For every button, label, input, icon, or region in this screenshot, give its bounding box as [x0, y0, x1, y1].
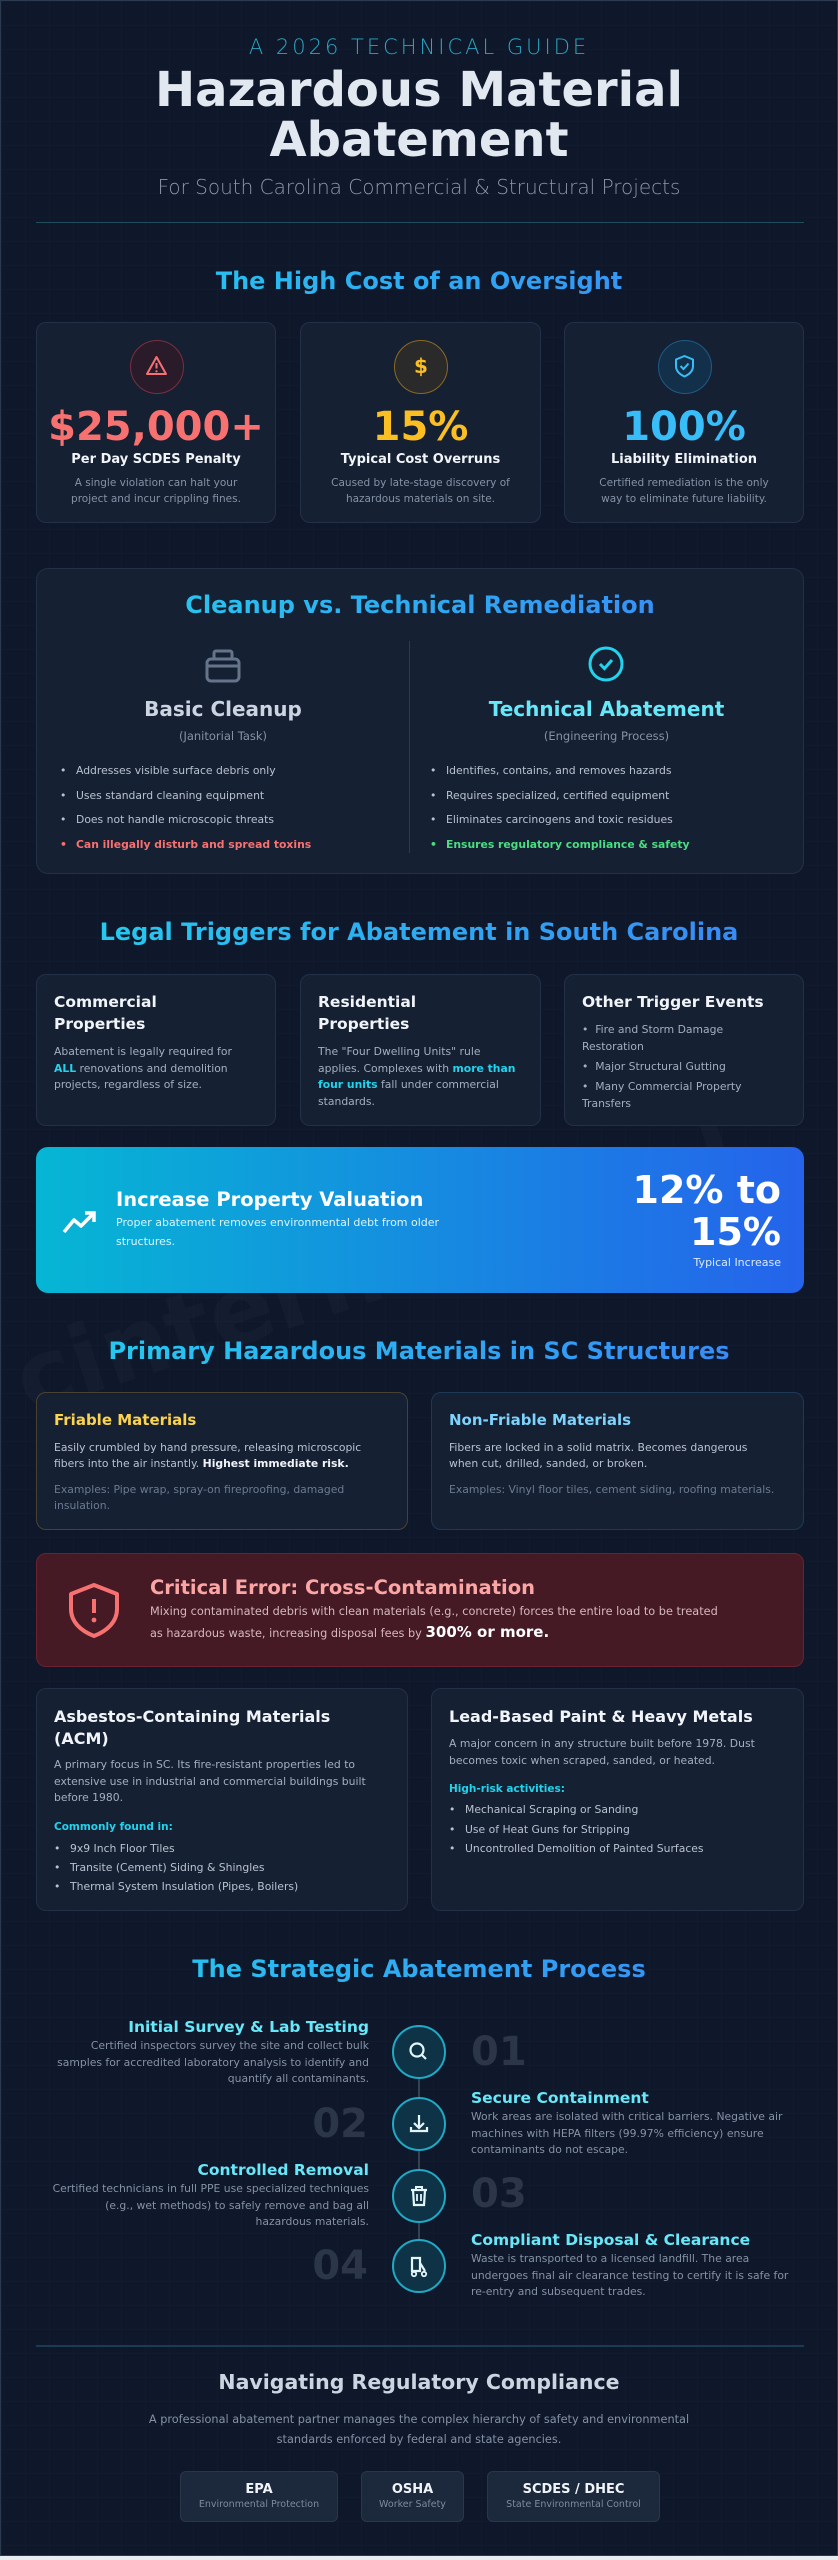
- card: other triggers: Other Trigger Events: [582, 993, 764, 1011]
- step 2: 02: [312, 2101, 368, 2147]
- timeline: [53, 2018, 788, 2298]
- icon: bucket: [206, 650, 240, 682]
- stat: 15%: [373, 404, 468, 450]
- card: overruns: Typical Cost Overruns: [341, 452, 500, 467]
- card: asbestos: before 1980.: [54, 1791, 123, 1804]
- banner text: structures.: [116, 1235, 175, 1248]
- heading: legal triggers: Legal Triggers for Abatement in South Carolina: [100, 918, 738, 946]
- column: technical abatement: Eliminates carcinogens and toxic residues: [446, 813, 673, 826]
- banner stat: [633, 1168, 781, 1269]
- column: basic cleanup: Basic Cleanup: [144, 697, 302, 721]
- step 1: Initial Survey & Lab Testing: [128, 2018, 369, 2036]
- step 4: re-entry and subsequent trades.: [471, 2285, 646, 2298]
- card: residential: Residential: [318, 993, 416, 1011]
- step 1: samples for accredited laboratory analysis to identify and: [57, 2056, 369, 2068]
- badge: EPA: [180, 2471, 338, 2522]
- step 4: 04: [312, 2243, 368, 2289]
- card: lead: Use of Heat Guns for Stripping: [465, 1822, 630, 1836]
- column: technical abatement: Ensures regulatory compliance & safety: [446, 838, 690, 851]
- step 1: [57, 2018, 527, 2085]
- icon: shield: [658, 340, 712, 394]
- icon: search: [392, 2025, 446, 2079]
- column: technical abatement: Requires specialized, certified equipment: [446, 789, 669, 802]
- card: asbestos: [36, 1688, 408, 1911]
- icon: warning: [130, 340, 184, 394]
- card: commercial: Properties: [54, 1015, 145, 1033]
- column: technical abatement: [432, 697, 724, 851]
- card: lead: Uncontrolled Demolition of Painted Surfaces: [465, 1842, 704, 1855]
- card: penalty: A single violation can halt your: [75, 477, 237, 489]
- paragraph: compliance: [149, 2413, 689, 2446]
- card: overruns: Caused by late-stage discovery of: [331, 477, 510, 489]
- card: liability: Liability Elimination: [611, 452, 757, 467]
- banner text: Increase Property Valuation: [116, 1188, 423, 1211]
- card: asbestos: A primary focus in SC. Its fire-resistant properties led to: [54, 1758, 355, 1771]
- icon: check circle: [588, 646, 624, 682]
- banner: property valuation: [36, 1147, 804, 1293]
- banner text: [116, 1188, 440, 1248]
- icon: shield alert: [69, 1583, 119, 1638]
- card: asbestos: Transite (Cement) Siding & Shingles: [70, 1861, 264, 1874]
- column: basic cleanup: Does not handle microscopic threats: [76, 813, 274, 826]
- column: basic cleanup: Addresses visible surface debris only: [76, 764, 276, 777]
- main title: [155, 62, 683, 168]
- card: commercial: Abatement is legally required for: [54, 1045, 232, 1058]
- callout text: [150, 1576, 718, 1641]
- heading: primary materials: Primary Hazardous Materials in SC Structures: [108, 1337, 730, 1365]
- callout text: as hazardous waste, increasing disposal fees by 300% or more.: [150, 1623, 549, 1641]
- card: overruns: [300, 322, 541, 523]
- icon: trend up: [62, 1211, 96, 1234]
- badge: SCDES: SCDES / DHEC: [523, 2482, 624, 2497]
- column: basic cleanup: Uses standard cleaning equipment: [76, 789, 264, 802]
- icon: truck: [392, 2239, 446, 2293]
- card: residential: Properties: [318, 1015, 409, 1033]
- card: lead: High-risk activities:: [449, 1783, 565, 1795]
- badge: SCDES: [487, 2471, 660, 2522]
- heading: process: The Strategic Abatement Process: [192, 1955, 646, 1983]
- step 2: Secure Containment: [471, 2089, 649, 2107]
- badge: OSHA: OSHA: [392, 2482, 433, 2497]
- badge: EPA: Environmental Protection: [199, 2499, 319, 2510]
- callout text: Mixing contaminated debris with clean materials (e.g., concrete) forces the entire load to be treated: [150, 1605, 718, 1618]
- banner text: Proper abatement removes environmental debt from older: [116, 1216, 439, 1229]
- subtitle: For South Carolina Commercial & Structural Projects: [158, 175, 680, 199]
- heading: regulatory compliance: Navigating Regulatory Compliance: [218, 2370, 620, 2394]
- step 4: Compliant Disposal & Clearance: [471, 2231, 750, 2249]
- icon: money: [394, 340, 448, 394]
- banner stat: 15%: [690, 1210, 781, 1254]
- card: friable: fibers into the air instantly. Highest immediate risk.: [54, 1457, 349, 1470]
- column: technical abatement: Identifies, contains, and removes hazards: [446, 764, 672, 777]
- badge: OSHA: Worker Safety: [379, 2499, 446, 2510]
- card: other triggers: • Fire and Storm Damage: [582, 1023, 723, 1036]
- card: asbestos: Commonly found in:: [54, 1821, 173, 1833]
- heading: process: [1, 1953, 837, 1985]
- step 1: Certified inspectors survey the site and collect bulk: [91, 2039, 369, 2052]
- column: basic cleanup: [62, 697, 311, 851]
- tagline: A 2026 TECHNICAL GUIDE: [249, 35, 589, 59]
- heading: high cost: The High Cost of an Oversight: [216, 267, 622, 295]
- column: basic cleanup: Can illegally disturb and spread toxins: [76, 838, 311, 851]
- card: commercial: ALL renovations and demolition: [54, 1062, 228, 1074]
- callout text: Critical Error: Cross-Contamination: [150, 1576, 535, 1599]
- paragraph: compliance: standards enforced by federal and state agencies.: [277, 2432, 561, 2446]
- card: residential: The "Four Dwelling Units" rule: [318, 1045, 480, 1058]
- card: residential: applies. Complexes with more than: [318, 1062, 515, 1074]
- card: asbestos: 9x9 Inch Floor Tiles: [70, 1842, 175, 1855]
- card: lead: A major concern in any structure built before 1978. Dust: [449, 1737, 755, 1750]
- heading: primary materials: [1, 1335, 837, 1367]
- step 3: 03: [471, 2171, 527, 2217]
- badge: EPA: EPA: [245, 2482, 273, 2497]
- card: asbestos: Asbestos-Containing Materials: [54, 1707, 330, 1726]
- card: non-friable: when cut, drilled, sanded, or broken.: [449, 1457, 647, 1470]
- card: other triggers: Transfers: [582, 1097, 631, 1110]
- step 4: undergoes final air clearance testing to certify it is safe for: [471, 2268, 788, 2282]
- panel heading: [37, 589, 803, 621]
- banner stat: Typical Increase: [694, 1256, 781, 1269]
- step 2: contaminants do not escape.: [471, 2143, 628, 2156]
- card: residential: [300, 974, 541, 1126]
- step 3: hazardous materials.: [256, 2215, 369, 2228]
- card: non-friable: [431, 1392, 804, 1530]
- card: commercial: Commercial: [54, 993, 157, 1011]
- card: residential: four units fall under commercial: [318, 1078, 499, 1091]
- card: other triggers: [564, 974, 804, 1126]
- card: friable: [36, 1392, 408, 1530]
- watermark: cinternational: [1, 1098, 751, 1436]
- card: asbestos: extensive use in industrial and commercial buildings built: [54, 1774, 366, 1788]
- card: friable: Easily crumbled by hand pressure, releasing microscopic: [54, 1441, 361, 1454]
- card: liability: way to eliminate future liability.: [601, 493, 767, 505]
- card: liability: [564, 322, 804, 523]
- callout: cross-contamination: [36, 1553, 804, 1667]
- main title: Hazardous Material: [155, 62, 683, 118]
- card: penalty: [36, 322, 276, 523]
- card: overruns: hazardous materials on site.: [346, 493, 495, 505]
- card: non-friable: Examples: Vinyl floor tiles, cement siding, roofing materials.: [449, 1483, 774, 1496]
- panel heading: Cleanup vs. Technical Remediation: [185, 591, 655, 619]
- step 2: [312, 2089, 782, 2156]
- step 4: Waste is transported to a licensed landfill. The area: [471, 2252, 749, 2265]
- stat: $25,000+: [48, 404, 264, 450]
- card: commercial: [36, 974, 276, 1126]
- column: technical abatement: (Engineering Process): [544, 729, 669, 743]
- card: liability: Certified remediation is the only: [599, 477, 769, 489]
- heading: high cost: [1, 265, 837, 297]
- card: lead: Mechanical Scraping or Sanding: [465, 1803, 638, 1816]
- card: non-friable: Non-Friable Materials: [449, 1411, 631, 1429]
- step 1: quantify all contaminants.: [228, 2072, 369, 2085]
- card: penalty: Per Day SCDES Penalty: [71, 452, 241, 467]
- card: friable: Examples: Pipe wrap, spray-on fireproofing, damaged: [54, 1483, 344, 1496]
- heading: legal triggers: [1, 916, 837, 948]
- card: lead: becomes toxic when scraped, sanded, or heated.: [449, 1754, 715, 1766]
- badge: OSHA: [361, 2471, 464, 2522]
- step 1: 01: [471, 2029, 527, 2075]
- step 2: machines with HEPA filters (99.97% efficiency) ensure: [471, 2126, 764, 2140]
- column: technical abatement: Technical Abatement: [489, 697, 724, 721]
- card: residential: standards.: [318, 1094, 375, 1108]
- card: penalty: project and incur crippling fines.: [71, 493, 241, 505]
- icon: trash: [392, 2169, 446, 2223]
- step 2: Work areas are isolated with critical barriers. Negative air: [471, 2110, 782, 2123]
- panel: cleanup vs remediation: [36, 568, 804, 874]
- card: lead: [431, 1688, 804, 1911]
- step 3: (e.g., wet methods) to safely remove and bag all: [105, 2198, 369, 2212]
- banner stat: 12% to: [633, 1168, 781, 1212]
- card: other triggers: Restoration • Major Structural Gutting • Many Commercial Property: [582, 1040, 742, 1093]
- card: friable: insulation.: [54, 1499, 110, 1512]
- card: commercial: projects, regardless of size.: [54, 1078, 202, 1091]
- main title: Abatement: [269, 112, 569, 168]
- step 3: Certified technicians in full PPE use specialized techniques: [53, 2182, 369, 2195]
- card: lead: Lead-Based Paint & Heavy Metals: [449, 1707, 753, 1726]
- step 4: [312, 2231, 788, 2298]
- card: friable: Friable Materials: [54, 1411, 196, 1429]
- card: non-friable: Fibers are locked in a solid matrix. Becomes dangerous: [449, 1441, 747, 1454]
- stat: 100%: [622, 404, 746, 450]
- badge: SCDES: State Environmental Control: [506, 2499, 641, 2510]
- paragraph: compliance: A professional abatement partner manages the complex hierarchy of safety and environmental: [149, 2413, 689, 2426]
- column: basic cleanup: (Janitorial Task): [179, 729, 267, 743]
- card: asbestos: Thermal System Insulation (Pipes, Boilers): [70, 1880, 298, 1893]
- step 3: [53, 2161, 527, 2228]
- icon: money: $: [414, 354, 428, 378]
- card: asbestos: (ACM): [54, 1729, 109, 1748]
- step 3: Controlled Removal: [197, 2161, 369, 2179]
- icon: download: [392, 2097, 446, 2151]
